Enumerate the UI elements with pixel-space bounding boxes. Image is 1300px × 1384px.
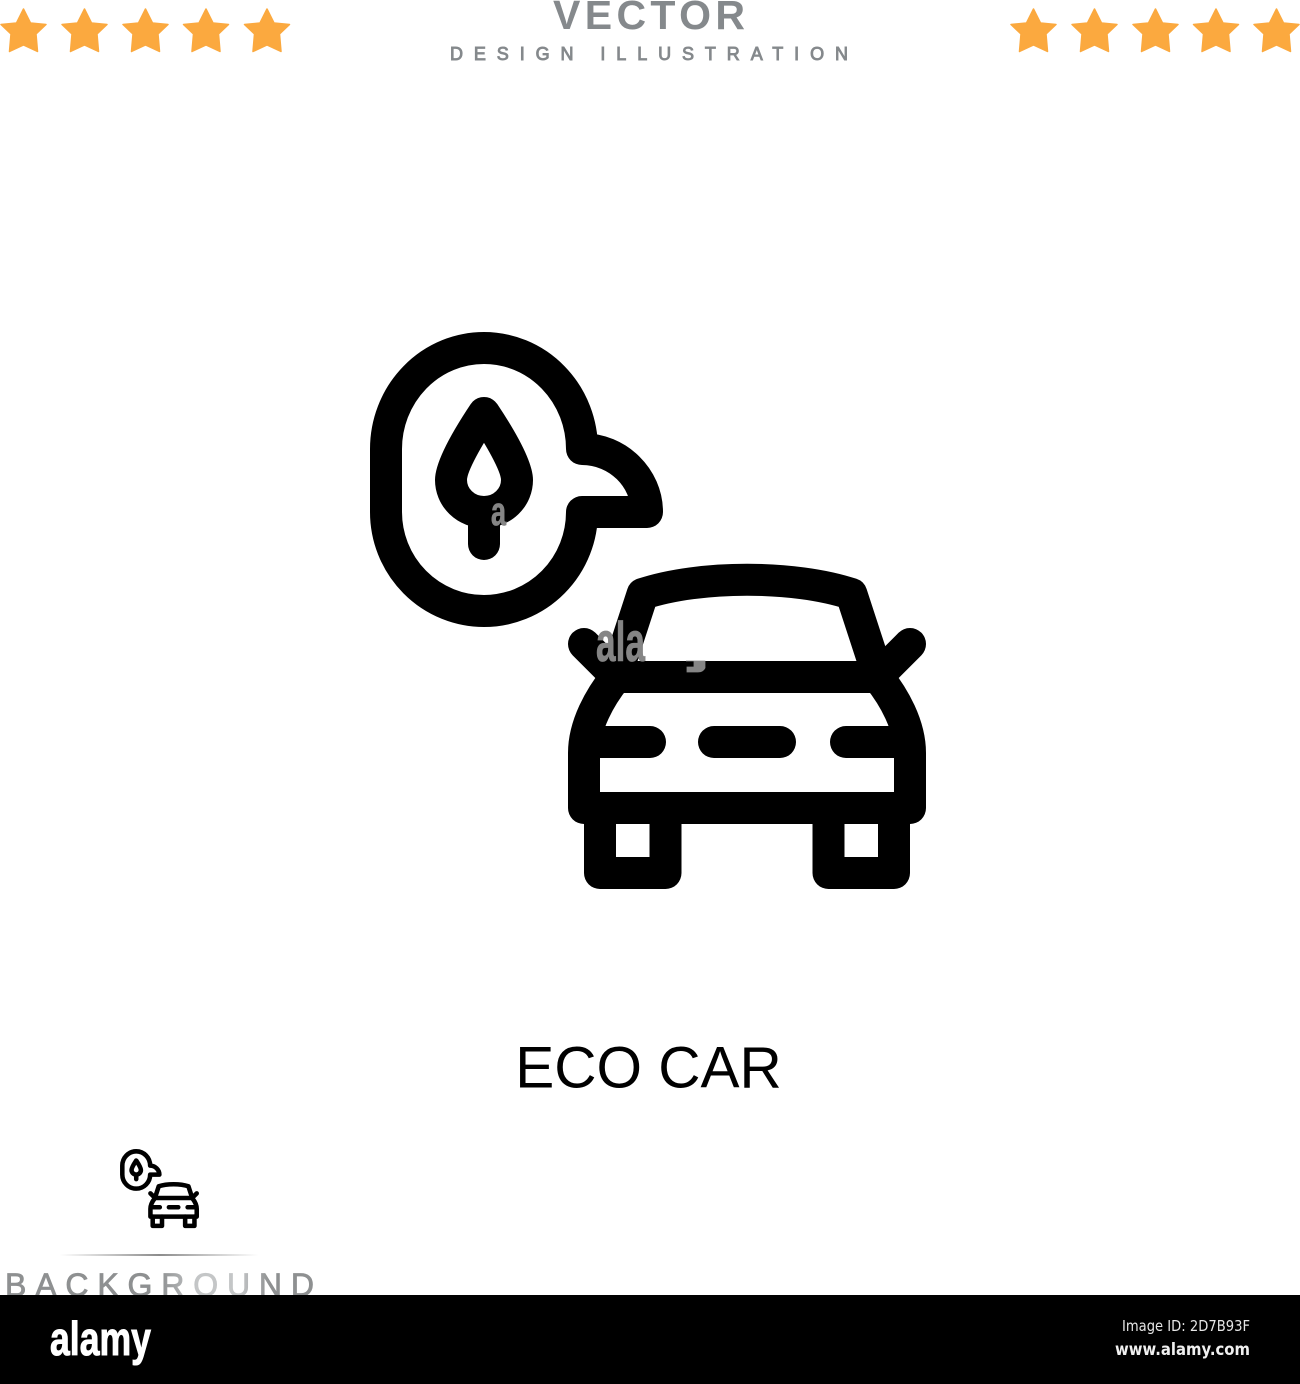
left star rating	[1, 9, 290, 52]
watermark fragments: ala	[596, 610, 646, 673]
watermark fragments	[491, 490, 705, 673]
watermark fragments: a	[491, 490, 507, 534]
icon: car lights	[590, 726, 904, 758]
icon: tree leaf	[451, 413, 517, 544]
footer image id: Image ID: 2D7B93F	[1122, 1317, 1250, 1335]
icon: eco car small	[122, 1151, 197, 1226]
footer bar	[0, 1295, 1300, 1384]
label: background: BACKGROUND	[5, 1267, 314, 1303]
icon: car mirrors	[584, 644, 910, 668]
footer logo: alamy: alamy	[50, 1312, 151, 1365]
footer url: www.alamy.com	[1115, 1340, 1250, 1359]
icon: right wheel	[828, 808, 894, 873]
icon: car windshield	[616, 580, 878, 677]
right star rating	[1011, 9, 1299, 52]
title: eco car: ECO CAR	[515, 1036, 782, 1100]
icon: eco car large	[386, 348, 910, 873]
icon: speech bubble	[386, 348, 647, 611]
icon: car body	[584, 677, 910, 808]
icon: left wheel	[600, 808, 666, 873]
subheading: design illustration: DESIGN ILLUSTRATION	[450, 44, 848, 64]
